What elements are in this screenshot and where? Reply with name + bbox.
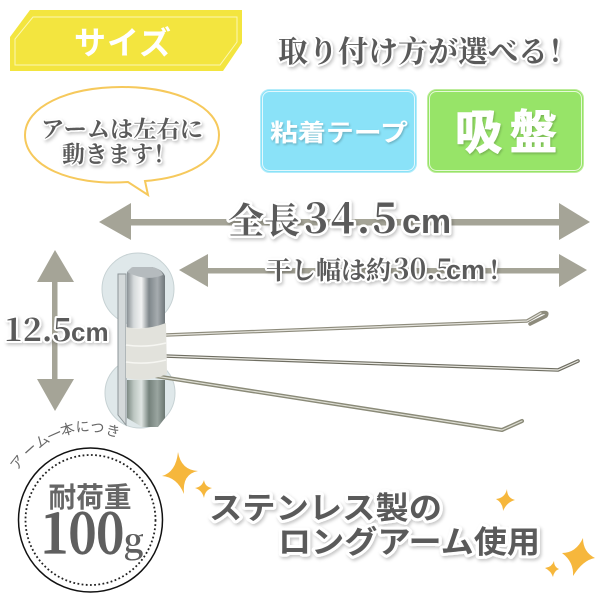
arrow: total length: [99, 203, 590, 240]
curved label: ム: [32, 430, 52, 451]
bubble text line 2: 動きます！: [62, 136, 176, 169]
button label: 粘着テープ: [270, 120, 408, 147]
curved label: き: [104, 421, 122, 440]
dimension: height: cm: [71, 317, 109, 347]
load capacity badge: g: [124, 515, 144, 562]
curved label: ア: [7, 452, 28, 473]
banner: サイズ: [10, 10, 242, 71]
curved label: 一: [45, 424, 64, 445]
curved label: 本: [58, 420, 76, 439]
suction cups: [102, 253, 175, 428]
speech bubble: [25, 87, 219, 195]
hinge: [126, 323, 167, 380]
arms: [155, 312, 578, 430]
heading: mounting choice: 取り付け方が選べる！: [278, 27, 578, 71]
dimension: height: 12.5: [4, 305, 71, 351]
badge label: 耐荷重: [48, 482, 132, 513]
curved label: [7, 418, 122, 473]
curved label: ー: [19, 439, 40, 460]
upper cylinder: [127, 267, 165, 328]
button label: 吸盤: [455, 106, 565, 159]
load capacity badge: [18, 448, 162, 592]
button: adhesive tape: [260, 90, 416, 172]
button: suction cup: [428, 90, 584, 172]
dimension: drying width: cm: [446, 255, 485, 285]
curved label: に: [75, 418, 90, 435]
product: towel rack: [102, 253, 578, 430]
lower cylinder: [127, 380, 165, 427]
dimension: drying width: 30.5: [393, 248, 452, 288]
badge value: 100: [41, 490, 124, 570]
caption line 1: ステンレス製の: [209, 491, 442, 526]
caption line 2: ロングアーム使用: [278, 525, 540, 560]
sparkles: [162, 452, 595, 577]
curved label: つ: [90, 419, 105, 436]
dimension: total length: 34.5: [304, 186, 399, 245]
dimension: total length: 全長: [228, 193, 300, 244]
banner title: サイズ: [74, 25, 172, 61]
dimension: drying width: 干し幅は約: [266, 251, 391, 287]
dimension: total length: cm: [402, 203, 451, 241]
arrow: height: [37, 250, 74, 411]
mounting plate: [118, 274, 126, 425]
bubble text line 1: アームは左右に: [41, 111, 203, 144]
dimension: drying width: ！: [488, 251, 513, 287]
arrow: drying width: [179, 254, 587, 287]
